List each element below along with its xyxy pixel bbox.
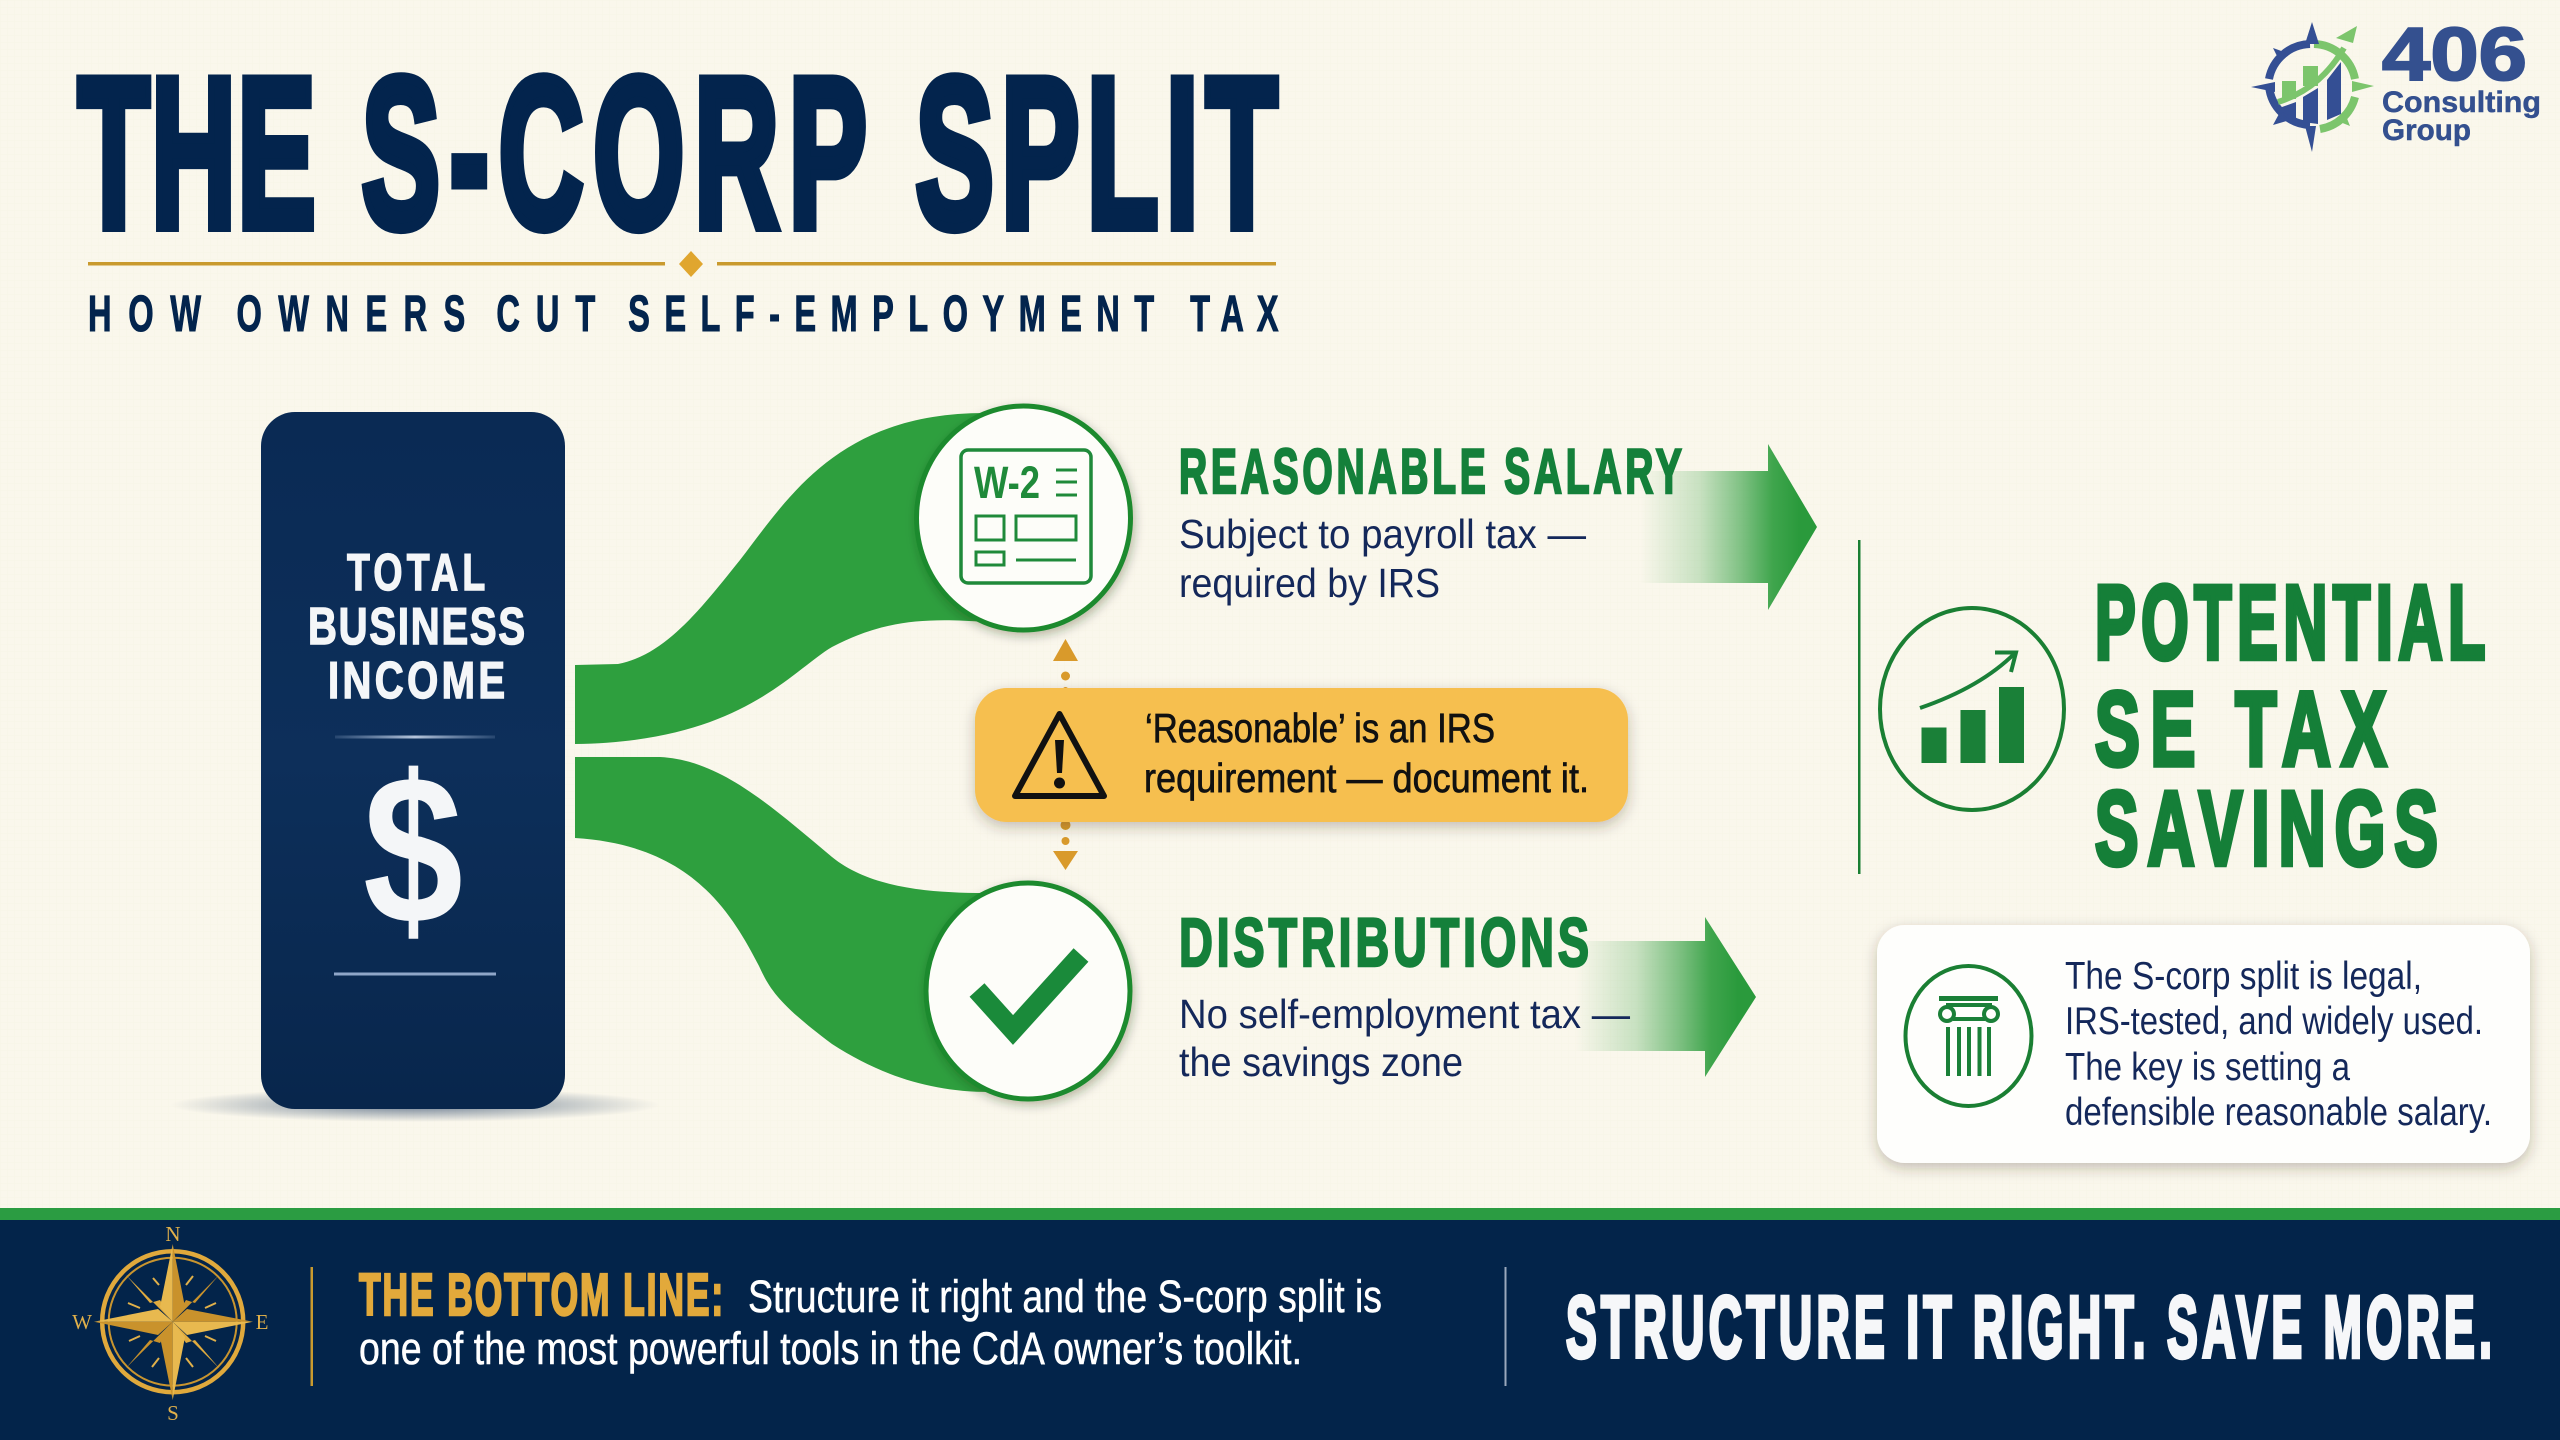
card text: defensible reasonable salary. (2065, 1091, 2492, 1134)
subtitle: CUT (496, 286, 636, 343)
card text: IRS-tested, and widely used. (2065, 1000, 2483, 1043)
logo compass mark (2251, 22, 2374, 152)
callout text: requirement — document it. (1144, 755, 1589, 801)
title: S-CORP (362, 34, 917, 272)
dollar sign: $ (363, 731, 463, 968)
connector: dotted arrow up (1053, 639, 1078, 693)
connector: dotted arrow down (1053, 820, 1078, 870)
subtitle: TAX (1190, 286, 1291, 343)
logo wordmark: Consulting (2382, 86, 2541, 119)
bottom line text: one of the most powerful tools in the CdA owner’s toolkit. (359, 1323, 1302, 1374)
card text: The S-corp split is legal, (2065, 955, 2422, 998)
text: salary description: Subject to payroll tax — (1179, 511, 1586, 557)
heading: potential SE tax savings: SE TAX (2095, 670, 2386, 788)
card text (2065, 955, 2492, 1134)
footer band (0, 1208, 2560, 1440)
panel: legal note card (1877, 925, 2530, 1163)
text: distributions description: No self-employment tax — (1179, 991, 1630, 1037)
heading: potential SE tax savings: POTENTIAL (2095, 564, 2485, 682)
bottom line text: THE BOTTOM LINE: (359, 1263, 723, 1328)
icon: W-2 form circle (916, 406, 1130, 630)
panel label (308, 543, 525, 709)
icon: gold compass rose (72, 1222, 268, 1425)
heading: distributions: DISTRIBUTIONS (1179, 904, 1589, 981)
heading: potential SE tax savings: SAVINGS (2095, 770, 2438, 887)
title divider with gold diamond (88, 251, 1276, 277)
panel label: INCOME (328, 651, 505, 709)
arrow: salary to savings (1640, 444, 1817, 610)
icon: gold compass rose: S (167, 1401, 179, 1425)
title: SPLIT (916, 34, 1285, 272)
icon: gold compass rose: N (165, 1222, 181, 1246)
subtitle: SELF-EMPLOYMENT (628, 286, 1192, 343)
footer slogan: STRUCTURE IT RIGHT. SAVE MORE. (1566, 1278, 2492, 1376)
heading: potential SE tax savings (2095, 564, 2485, 887)
subtitle: OWNERS (236, 286, 507, 343)
logo wordmark: 406 (2382, 12, 2527, 96)
icon: column (1906, 966, 2032, 1106)
title: THE (78, 34, 351, 272)
callout text (1144, 705, 1589, 801)
bottom line text: Structure it right and the S-corp split is (748, 1271, 1382, 1322)
text: distributions description: the savings zone (1179, 1039, 1463, 1085)
panel label: TOTAL (347, 543, 485, 601)
text: salary description: required by IRS (1179, 560, 1440, 606)
logo wordmark (2382, 12, 2541, 147)
panel label: BUSINESS (308, 597, 525, 655)
icon: gold compass rose: E (256, 1310, 268, 1334)
panel: total business income (170, 412, 660, 1122)
heading: reasonable salary: REASONABLE SALARY (1179, 438, 1682, 507)
icon: gold compass rose: W (72, 1310, 92, 1334)
logo: 406 Consulting Group (2251, 12, 2541, 152)
icon: checkmark circle (926, 883, 1130, 1099)
arrow: distributions to savings (1575, 917, 1756, 1077)
bottom line text (359, 1263, 1382, 1374)
split ribbon: upper path to salary (575, 413, 985, 744)
icon: W-2 form circle: W-2 (974, 457, 1040, 508)
icon: warning triangle (1015, 714, 1104, 796)
split ribbon: lower path to distributions (575, 757, 990, 1092)
callout: reasonable requirement (975, 688, 1628, 822)
text: salary description (1179, 511, 1586, 606)
subtitle: HOW (88, 286, 243, 343)
icon: growth chart circle (1880, 608, 2064, 810)
logo wordmark: Group (2382, 114, 2471, 147)
text: distributions description (1179, 991, 1630, 1085)
callout text: ‘Reasonable’ is an IRS (1145, 705, 1495, 751)
card text: The key is setting a (2065, 1046, 2351, 1089)
